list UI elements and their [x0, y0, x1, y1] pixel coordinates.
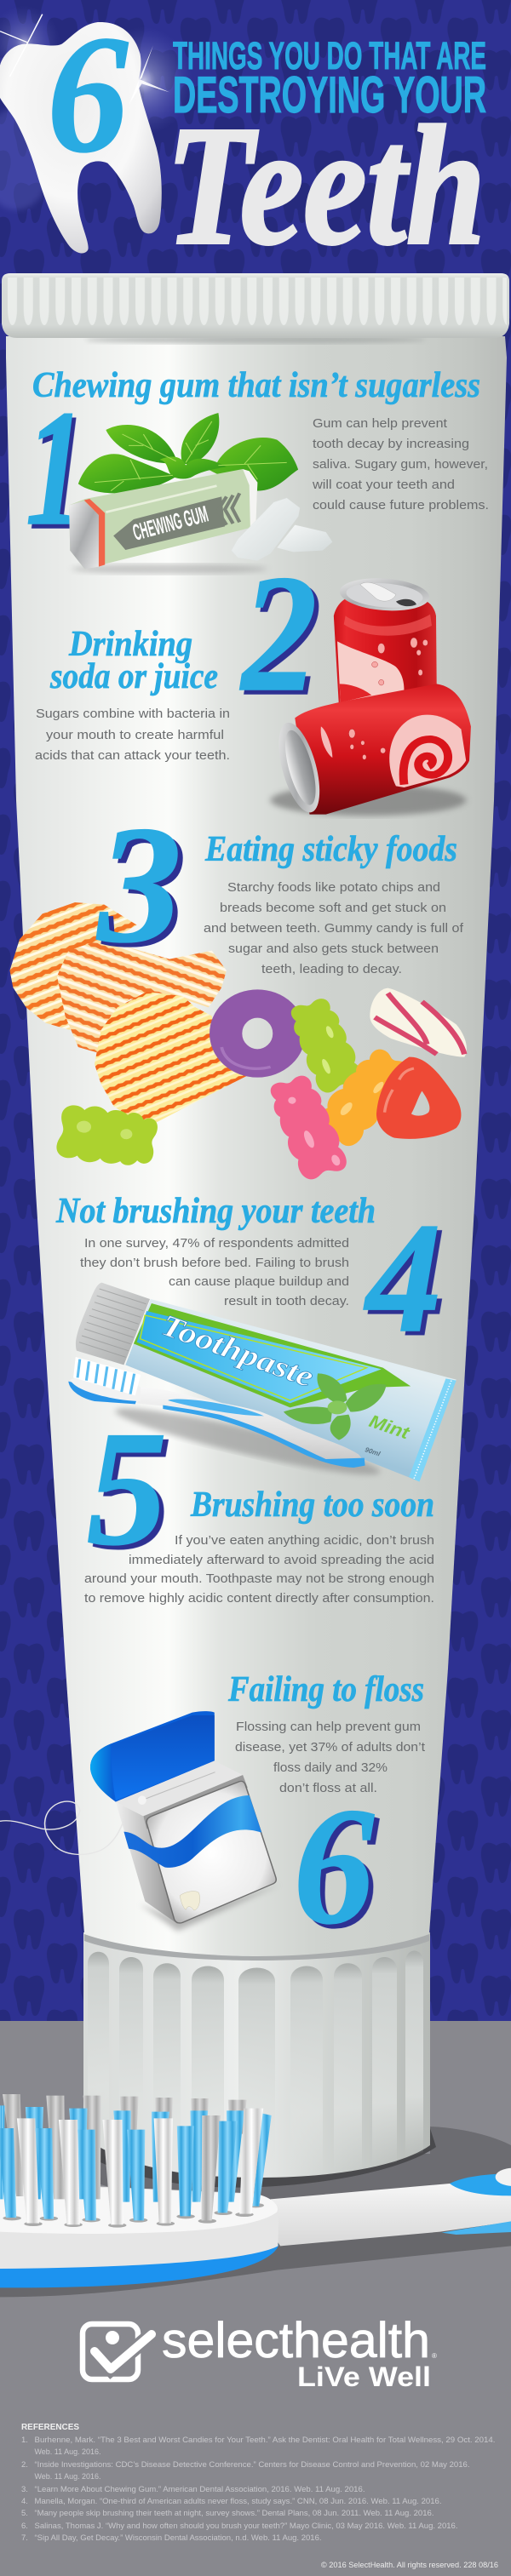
heading 1: Chewing gum that isn’t sugarless — [32, 366, 480, 405]
body text 2: Sugars combine with bacteria in — [36, 707, 230, 721]
body text 5: If you’ve eaten anything acidic, don’t brush — [175, 1534, 434, 1548]
illustration: toothpaste and toothbrush — [68, 1283, 456, 1485]
candy: pink bear — [263, 1072, 352, 1182]
reference list: 6. — [21, 2522, 28, 2531]
reference list: 1. — [21, 2436, 28, 2445]
floss box body — [116, 1760, 276, 1924]
reference list: Web. 11 Aug. 2016. — [34, 2472, 100, 2482]
body text 6 — [235, 1720, 425, 1795]
toothpaste tube body — [6, 335, 507, 1961]
tagline: LiVe Well — [297, 2361, 431, 2392]
heading 3: Eating sticky foods — [204, 830, 457, 869]
body text 1: saliva. Sugary gum, however, — [313, 458, 488, 472]
tube — [125, 1299, 456, 1482]
reference list — [21, 2436, 496, 2543]
copyright: © 2016 SelectHealth. All rights reserved. 228 08/16 — [321, 2561, 498, 2570]
floss box lid — [90, 1711, 215, 1802]
number 3: 3 — [96, 791, 181, 977]
logo wordmark: selecthealth — [162, 2313, 430, 2368]
references — [21, 2423, 498, 2570]
reference list: “Sip All Day, Get Decay.” Wisconsin Dental Association, n.d. Web. 11 Aug. 2016. — [34, 2533, 322, 2543]
mint sprig on tube — [284, 1373, 386, 1440]
tube collar — [83, 1932, 436, 2188]
bristles — [0, 2094, 272, 2228]
patterned blue background — [0, 0, 511, 2021]
body text 1: will coat your teeth and — [312, 478, 455, 492]
body text 2: acids that can attack your teeth. — [35, 749, 230, 763]
section 6: failing to floss — [0, 1670, 425, 1959]
body text 6: floss daily and 32% — [273, 1761, 388, 1775]
illustration: potato chips — [9, 902, 248, 1122]
registered mark: ® — [432, 2352, 437, 2360]
section 5: brushing too soon — [84, 1398, 434, 1606]
body text 1: tooth decay by increasing — [313, 438, 469, 451]
number 5: 5 — [87, 1398, 167, 1579]
number 6: 6 — [294, 1773, 375, 1959]
reference list: 4. — [21, 2497, 28, 2506]
illustration: gummy candies — [55, 988, 467, 1182]
candy: red heart ring — [376, 1057, 461, 1139]
references heading: REFERENCES — [21, 2423, 79, 2432]
illustration: floss box — [0, 1711, 280, 1931]
body text 3: breads become soft and get stuck on — [220, 902, 446, 915]
tube cap — [2, 273, 509, 338]
reference list: Salinas, Thomas J. “Why and how often should you brush your teeth?” Mayo Clinic, 03 May 2016. Web. 11 Aug. 2016. — [34, 2522, 458, 2531]
reference list: Manella, Morgan. “One-third of American adults never floss, study says.” CNN, 08 Jun. 2016. Web. 11 Aug. 2016. — [34, 2497, 441, 2506]
body text 4 — [80, 1237, 349, 1308]
body text 4: they don’t brush before bed. Failing to brush — [80, 1257, 349, 1270]
reference list: 5. — [21, 2509, 28, 2518]
title number 6: 6 — [47, 1, 129, 187]
title — [166, 34, 486, 280]
candy: white and pink twist — [370, 988, 467, 1057]
heading 6: Failing to floss — [227, 1670, 424, 1709]
body text 4: In one survey, 47% of respondents admitted — [84, 1237, 349, 1251]
reference list: 7. — [21, 2533, 28, 2543]
logo — [83, 2313, 437, 2392]
heading 2: soda or juice — [49, 657, 218, 696]
body text 3: and between teeth. Gummy candy is full of — [204, 922, 464, 936]
heading 4: Not brushing your teeth — [55, 1192, 376, 1231]
body text 3: sugar and also gets stuck between — [228, 942, 439, 956]
section 1: chewing gum — [26, 366, 489, 574]
heading 5: Brushing too soon — [190, 1485, 434, 1525]
body text 1: Gum can help prevent — [313, 417, 447, 431]
body text 6: Flossing can help prevent gum — [236, 1720, 421, 1734]
reference list: 2. — [21, 2460, 28, 2470]
tube cap — [76, 1283, 150, 1365]
heading 2: Drinking — [68, 625, 192, 664]
mint label: Mint — [366, 1411, 412, 1444]
illustration: mint leaves and gum pack — [69, 413, 332, 574]
section 4: not brushing — [55, 1191, 456, 1485]
body text 1: could cause future problems. — [313, 499, 489, 512]
body text 2: your mouth to create harmful — [46, 729, 224, 742]
reference list: Burhenne, Mark. “The 3 Best and Worst Candies for Your Teeth.” Ask the Dentist: Oral Health for Total Wellness, 29 Oct. 2014. — [34, 2436, 496, 2445]
body text 1 — [312, 417, 489, 512]
body text 5 — [84, 1534, 434, 1606]
reference list: “Inside Investigations: CDC’s Disease Detective Conference.” Centers for Disease Control and Prevention, 02 May 2016. — [34, 2460, 470, 2470]
candy: purple ring — [221, 1004, 289, 1068]
gum pieces — [277, 525, 332, 552]
number 1: 1 — [26, 376, 85, 559]
reference list: Web. 11 Aug. 2016. — [34, 2447, 100, 2457]
body text 2 — [35, 707, 230, 763]
grey floor — [0, 2021, 511, 2576]
floor shadow of tube — [85, 2127, 511, 2235]
body text 3 — [204, 881, 464, 976]
body text 5: to remove highly acidic content directly after consumption. — [84, 1592, 434, 1606]
number 4: 4 — [364, 1191, 441, 1365]
bottom toothbrush — [0, 2094, 511, 2297]
body text 4: can cause plaque buildup and — [169, 1275, 349, 1289]
body text 6: disease, yet 37% of adults don’t — [235, 1741, 425, 1755]
section 3: sticky foods — [9, 791, 467, 1182]
candy: green bear — [284, 995, 366, 1096]
body text 6: don’t floss at all. — [279, 1782, 377, 1795]
lower can — [271, 684, 471, 816]
toothbrush — [68, 1357, 365, 1468]
brush handle — [271, 2168, 511, 2246]
tooth illustration with sparkles — [0, 6, 192, 253]
candy: orange bear — [309, 1044, 417, 1151]
reference list: 3. — [21, 2485, 28, 2494]
body text 4: result in tooth decay. — [224, 1295, 349, 1308]
illustration: soda cans — [271, 575, 471, 816]
number 2: 2 — [239, 540, 317, 726]
brush shadow — [0, 2213, 511, 2297]
collar ridges — [88, 1951, 423, 2176]
body text 3: teeth, leading to decay. — [261, 963, 402, 976]
body text 5: around your mouth. Toothpaste may not be strong enough — [84, 1572, 434, 1586]
volume label: 90ml — [364, 1445, 382, 1458]
body text 3: Starchy foods like potato chips and — [227, 881, 440, 895]
toothpaste brand text: Toothpaste — [157, 1308, 319, 1394]
reference list: “Many people skip brushing their teeth at night, survey shows.” Dental Plans, 08 Jun. 2011. Web. 11 Aug. 2016. — [34, 2509, 434, 2518]
brush head — [0, 2182, 278, 2287]
candy: green bear lying — [55, 1102, 160, 1170]
section 1: chewing gum: CHEWING GUM — [130, 501, 210, 546]
logo mark — [83, 2324, 152, 2379]
heading 2 — [49, 625, 218, 696]
reference list: “Learn More About Chewing Gum.” American Dental Association, 2016. Web. 11 Aug. 2016. — [34, 2485, 365, 2494]
gum pack — [69, 469, 257, 569]
floss thread — [0, 1801, 143, 1854]
upper can — [334, 575, 437, 707]
body text 5: immediately afterward to avoid spreading the acid — [129, 1554, 434, 1567]
section 2: soda or juice — [35, 540, 471, 816]
